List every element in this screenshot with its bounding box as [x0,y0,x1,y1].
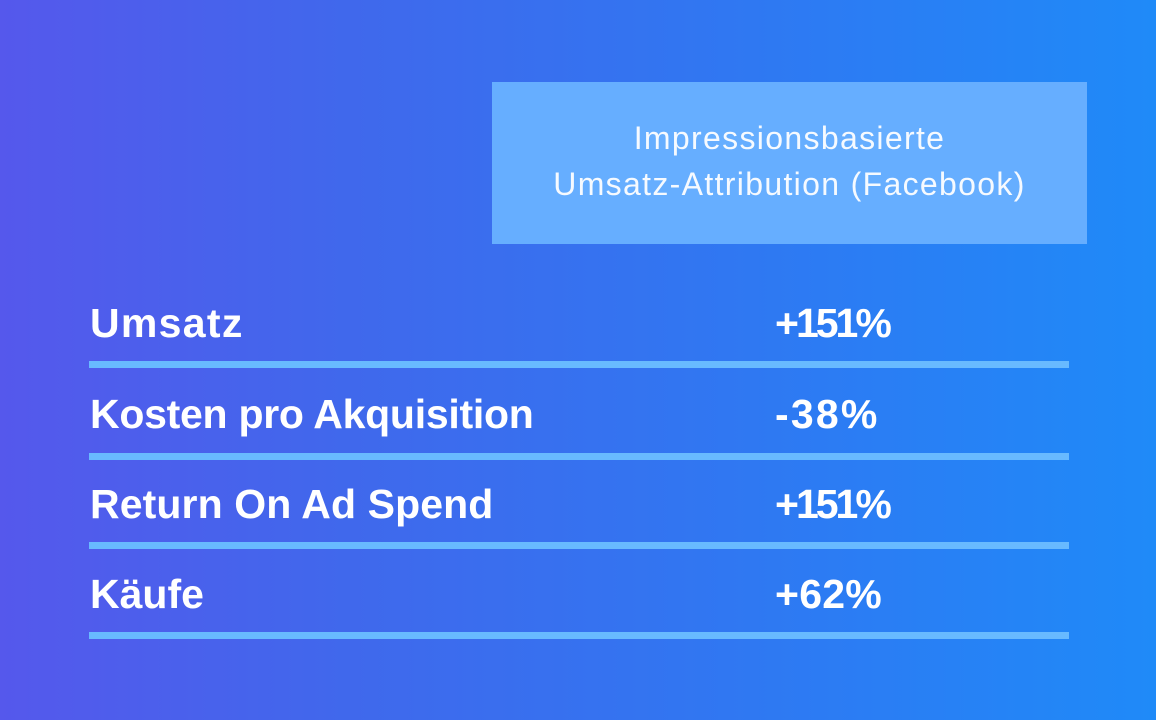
row value: Käufe: +62% [775,571,882,617]
row label: Kosten pro Akquisition: Kosten pro Akquisition [90,391,534,437]
row label: Käufe: Käufe [90,571,204,617]
row value: Return On Ad Spend: +151% [775,481,889,527]
row label: Umsatz: Umsatz [90,300,244,346]
row label: Return On Ad Spend: Return On Ad Spend [90,481,493,527]
row value: Umsatz: +151% [775,300,889,346]
row value: Kosten pro Akquisition: -38% [775,391,880,437]
panel: column header [492,82,1087,244]
heading line 2: Umsatz-Attribution (Facebook) [553,166,1026,202]
heading line 1: Impressionsbasierte [634,120,945,156]
